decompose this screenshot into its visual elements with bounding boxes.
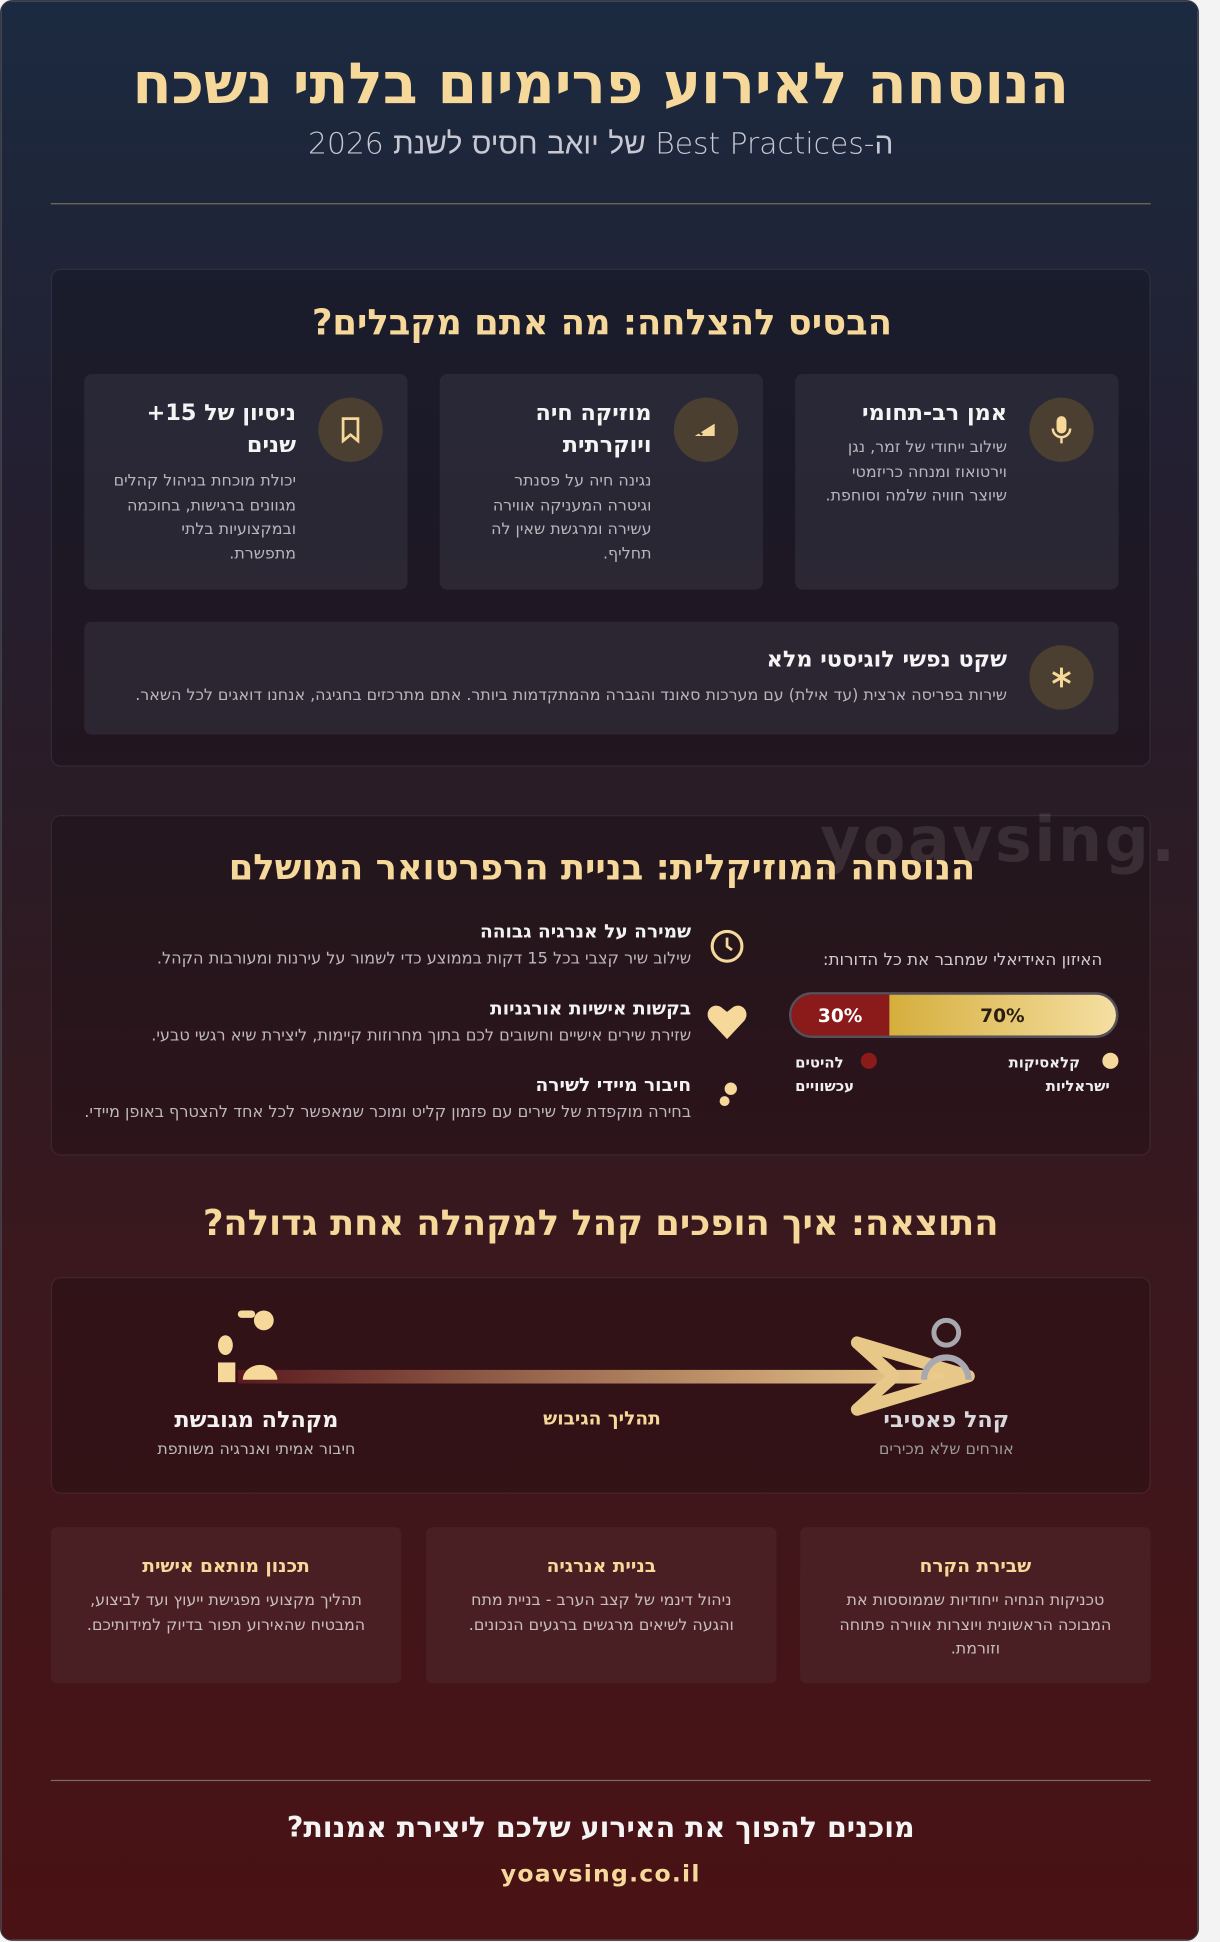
card: live music: מוזיקה חיה ויוקרתית — [536, 400, 652, 458]
card: personal plan — [51, 1527, 401, 1683]
list item: energy: שמירה על אנרגיה גבוהה — [480, 920, 691, 943]
chart: 70/30 bar: 30% — [818, 1004, 862, 1026]
icon: clock — [710, 930, 744, 963]
card: icebreaking — [800, 1527, 1151, 1683]
card: personal plan: תהליך מקצועי מפגישת ייעוץ ועד לביצוע, המבטיח שהאירוע תפור בדיוק למידותיכם. — [87, 1592, 365, 1634]
card: artist — [795, 374, 1118, 590]
legend: hits: להיטים — [795, 1054, 844, 1071]
card: experience — [84, 374, 407, 590]
card: artist: אמן רב-תחומי — [862, 400, 1007, 426]
card: experience: ניסיון של 15+ שנים — [147, 400, 296, 458]
icon: bookmark — [318, 398, 383, 462]
panel: transformation — [51, 1277, 1151, 1494]
card: icebreaking: טכניקות הנחיה ייחודיות שממוססות את המבוכה הראשונית ויוצרות אווירה פתוחה וזורמת. — [839, 1592, 1111, 1658]
card: logistics: שקט נפשי לוגיסטי מלא — [767, 647, 1007, 673]
title: הנוסחה לאירוע פרימיום בלתי נשכח — [132, 50, 1069, 116]
legend: classics: קלאסיקות — [1009, 1054, 1080, 1071]
card: personal plan: תכנון מותאם אישית — [142, 1554, 310, 1577]
chart: 70/30 bar — [789, 992, 1118, 1038]
card: energy building: בניית אנרגיה — [547, 1554, 656, 1577]
label: choir: חיבור אמיתי ואנרגיה משותפת — [157, 1440, 355, 1459]
legend: classics — [1008, 1052, 1118, 1095]
legend: hits: עכשוויים — [795, 1078, 854, 1095]
card: energy building: ניהול דינמי של קצב הערב - בניית מתח והגעה לשיאים מרגשים ברגעים הנכונים. — [469, 1592, 734, 1634]
watermark: yoavsing. — [820, 804, 1177, 876]
label: choir: מקהלה מגובשת — [174, 1407, 338, 1433]
icon: choir group — [218, 1310, 278, 1382]
card: energy building — [426, 1527, 777, 1683]
card: logistics: שירות בפריסה ארצית (עד אילת) עם מערכות סאונד והגברה מהמתקדמות ביותר. אתם מתרכזים בחגיגה, אנחנו דואגים לכל השאר. — [135, 686, 1007, 705]
card: live music: נגינה חיה על פסנתר וגיטרה המעניקה אווירה עשירה ומרגשת שאין לה תחליף. — [491, 472, 652, 563]
list item: energy: שילוב שיר קצבי בכל 15 דקות בממוצע כדי לשמור על עירנות ומעורבות הקהל. — [157, 950, 691, 969]
list item: energy — [157, 920, 744, 969]
url: yoavsing.co.il — [501, 1860, 701, 1888]
label: process: תהליך הגיבוש — [543, 1407, 661, 1429]
icon: dots — [720, 1082, 737, 1106]
list item: connection — [84, 1074, 737, 1122]
card: experience: יכולת מוכחת בניהול קהלים מגוונים ברגישות, בחוכמה ובמקצועיות בלתי מתפשרת. — [114, 472, 296, 563]
icon: mic — [1029, 398, 1094, 462]
text: balance: האיזון האידיאלי שמחבר את כל הדורות: — [823, 950, 1102, 970]
icon: heart — [708, 1006, 746, 1040]
label: choir — [157, 1407, 355, 1459]
list item: requests: שזירת שירים אישיים וחשובים לכם בתוך מחרוזות קיימות, ליצירת שיא רגשי טבעי. — [151, 1027, 691, 1045]
heading: musical: הנוסחה המוזיקלית: בניית הרפרטואר המושלם — [229, 847, 975, 888]
card: icebreaking: שבירת הקרח — [920, 1554, 1031, 1577]
icon: saxophone — [674, 398, 738, 462]
icon: sparkle — [1029, 645, 1094, 710]
CTA: מוכנים להפוך את האירוע שלכם ליצירת אמנות? — [287, 1812, 915, 1844]
subtitle: ה-Best Practices של יואב חסיס לשנת 2026 — [308, 126, 893, 161]
heading: result: התוצאה: איך הופכים קהל למקהלה אחת גדולה? — [203, 1203, 998, 1244]
label: passive — [879, 1407, 1014, 1459]
label: passive: קהל פאסיבי — [883, 1407, 1009, 1433]
list item: connection: חיבור מיידי לשירה — [536, 1074, 691, 1096]
heading: foundation: הבסיס להצלחה: מה אתם מקבלים? — [312, 302, 892, 343]
legend: classics: ישראליות — [1046, 1078, 1110, 1095]
list item: requests — [151, 997, 746, 1045]
panel: foundation — [51, 269, 1151, 767]
icon: passive person — [920, 1318, 972, 1380]
card: artist: שילוב ייחודי של זמר, נגן וירטואוז ומנחה כריזמטי שיוצר חוויה שלמה וסוחפת. — [826, 438, 1007, 505]
list item: connection: בחירה מוקפדת של שירים עם פזמון קליט ומוכר שמאפשר לכל אחד להצטרף באופן מיידי. — [84, 1104, 691, 1122]
card: live music — [440, 374, 763, 590]
legend: hits — [795, 1052, 877, 1095]
chart: 70/30 bar: 70% — [980, 1004, 1025, 1026]
arrow — [238, 1336, 975, 1416]
label: passive: אורחים שלא מכירים — [879, 1440, 1014, 1459]
panel: musical formula — [51, 815, 1151, 1156]
card: logistics — [84, 622, 1118, 734]
list item: requests: בקשות אישיות אורגניות — [490, 997, 691, 1019]
